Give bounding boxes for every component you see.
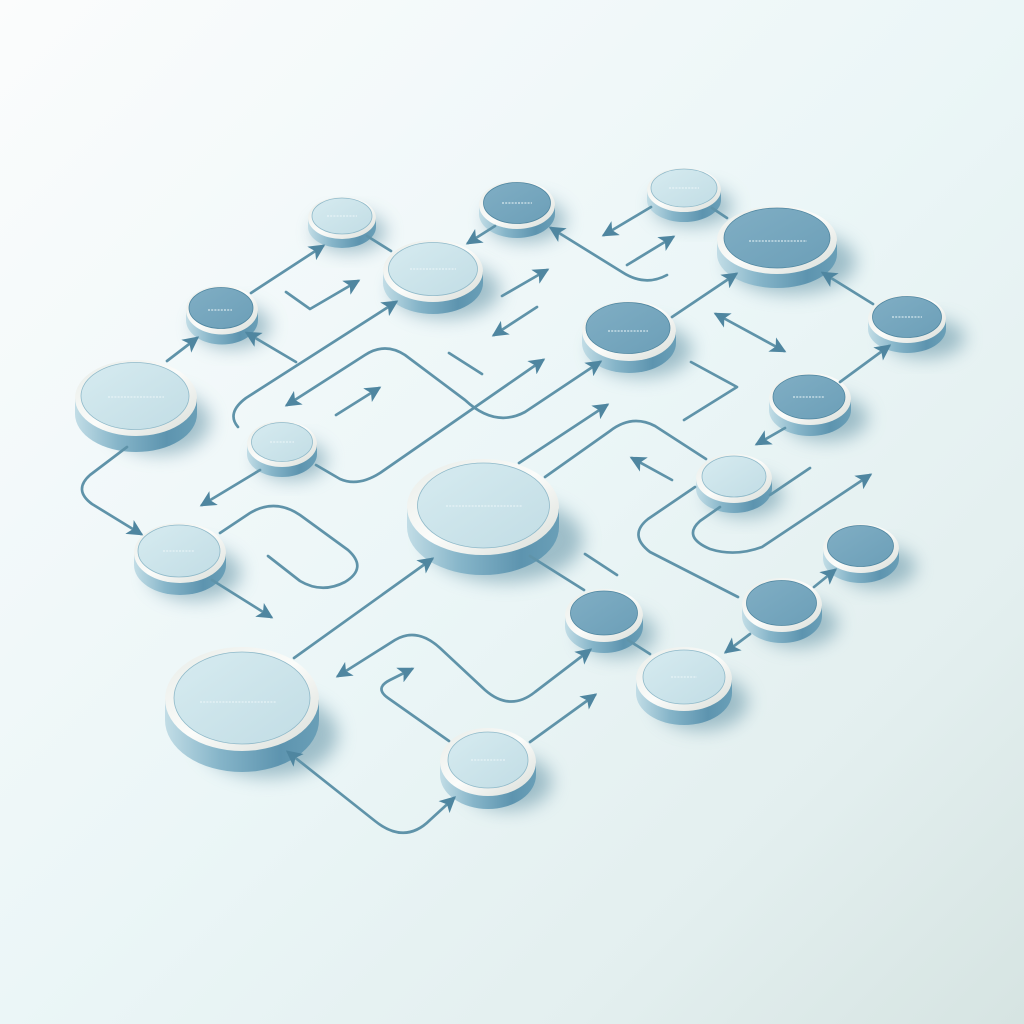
node 9	[769, 373, 868, 441]
node 6	[186, 286, 270, 348]
node 17	[742, 578, 838, 647]
node 18	[636, 647, 748, 730]
node 19	[165, 647, 338, 777]
node 4	[717, 206, 856, 294]
node 3	[647, 168, 733, 226]
node 14	[134, 523, 241, 600]
node 5	[383, 240, 500, 318]
node 7	[582, 301, 692, 377]
node 11	[247, 421, 327, 480]
node 8	[868, 295, 965, 358]
node 1	[308, 197, 386, 252]
node 12	[696, 454, 783, 517]
connector arrows	[82, 207, 889, 833]
node 20	[440, 728, 552, 810]
node 15	[823, 524, 916, 588]
node 16	[565, 589, 656, 657]
node 2	[479, 181, 566, 242]
node 10	[75, 360, 210, 454]
node 13 central hub	[407, 459, 583, 582]
